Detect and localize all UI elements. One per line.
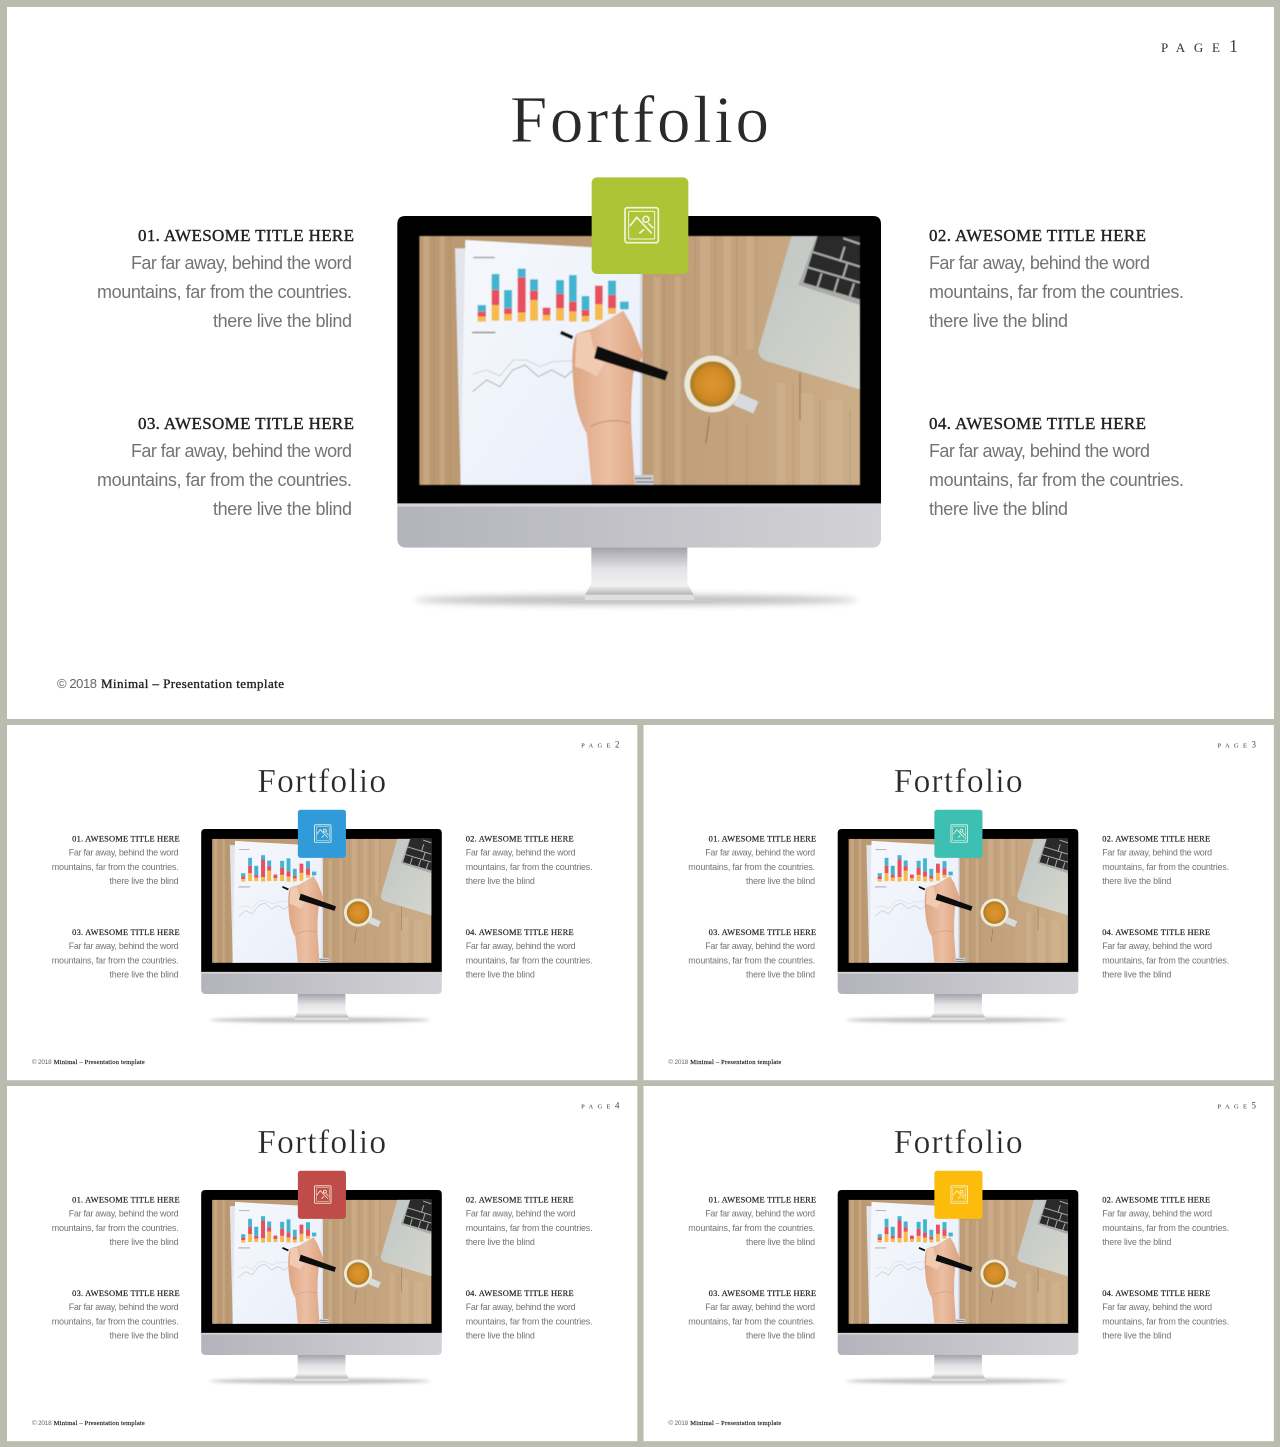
footer: © 2018 (668, 1419, 689, 1427)
icon: image badge (934, 1171, 982, 1219)
footer: Minimal – Presentation template (690, 1420, 781, 1427)
monitor with photo (201, 1190, 442, 1384)
text block 03: 03. AWESOME TITLE HERE (709, 927, 816, 937)
text block 01: 01. AWESOME TITLE HERE (138, 226, 354, 245)
text block 03: Far far away, behind the word (705, 941, 815, 951)
slide 3: teal panel (644, 725, 1274, 1080)
page number (1161, 36, 1238, 56)
text block 01: there live the blind (109, 876, 179, 886)
text block 02: there live the blind (929, 311, 1068, 331)
slide 2: blue panel (7, 725, 637, 1080)
footer: © 2018 (32, 1058, 52, 1066)
text block 04: Far far away, behind the word (466, 1302, 576, 1312)
text block 02: mountains, far from the countries. (1102, 862, 1229, 872)
text block 04: 04. AWESOME TITLE HERE (466, 927, 574, 937)
text block 01 (688, 1194, 816, 1247)
footer: Minimal – Presentation template (54, 1420, 145, 1427)
text block 04: 04. AWESOME TITLE HERE (1102, 1288, 1210, 1298)
text block 01 (97, 226, 354, 331)
icon: image badge (592, 177, 688, 274)
text block 04: Far far away, behind the word (1102, 941, 1212, 951)
text block 04: mountains, far from the countries. (1102, 955, 1229, 965)
page number: 4 (615, 1100, 620, 1110)
text block 04 (466, 927, 593, 980)
title: Fortfolio (257, 763, 386, 800)
text block 01: mountains, far from the countries. (52, 1223, 179, 1233)
text block 01: Far far away, behind the word (705, 847, 815, 857)
page number: PAGE (581, 742, 611, 749)
text block 03: there live the blind (746, 970, 815, 980)
text block 03: mountains, far from the countries. (688, 1316, 815, 1326)
title: Fortfolio (257, 1124, 386, 1161)
monitor with photo (397, 216, 881, 605)
text block 03: 03. AWESOME TITLE HERE (709, 1288, 816, 1298)
text block 01: Far far away, behind the word (69, 847, 179, 857)
text block 02: there live the blind (1102, 876, 1171, 886)
text block 01 (688, 833, 816, 886)
page number: PAGE (1161, 40, 1220, 55)
text block 04: 04. AWESOME TITLE HERE (466, 1288, 574, 1298)
footer: Minimal – Presentation template (101, 676, 284, 691)
text block 02 (466, 833, 593, 886)
text block 03: Far far away, behind the word (131, 441, 352, 461)
text block 03 (688, 1288, 816, 1341)
footer: Minimal – Presentation template (690, 1059, 781, 1066)
text block 04 (466, 1288, 593, 1341)
text block 04: mountains, far from the countries. (466, 955, 593, 965)
text block 02 (466, 1194, 593, 1247)
text block 01: 01. AWESOME TITLE HERE (72, 1194, 180, 1204)
text block 03: 03. AWESOME TITLE HERE (72, 1288, 180, 1298)
text block 01: 01. AWESOME TITLE HERE (72, 833, 180, 843)
text block 02: 02. AWESOME TITLE HERE (929, 226, 1146, 245)
text block 03 (52, 1288, 180, 1341)
slide 4: red panel (7, 1086, 637, 1441)
text block 04: there live the blind (1102, 1331, 1171, 1341)
text block 03: Far far away, behind the word (69, 941, 179, 951)
text block 01: there live the blind (109, 1237, 179, 1247)
text block 02: 02. AWESOME TITLE HERE (466, 833, 574, 843)
text block 02 (1102, 833, 1229, 886)
text block 01 (52, 1194, 180, 1247)
text block 02: 02. AWESOME TITLE HERE (1102, 833, 1210, 843)
text block 02 (929, 226, 1184, 331)
text block 04: 04. AWESOME TITLE HERE (929, 414, 1146, 433)
icon: image badge (934, 810, 982, 858)
title: Fortfolio (510, 83, 769, 157)
page number (581, 1100, 620, 1110)
footer: © 2018 (32, 1419, 52, 1427)
text block 02: mountains, far from the countries. (1102, 1223, 1229, 1233)
text block 03 (97, 414, 354, 519)
text block 01: 01. AWESOME TITLE HERE (709, 833, 816, 843)
text block 03: 03. AWESOME TITLE HERE (138, 414, 354, 433)
text block 02: Far far away, behind the word (466, 1208, 576, 1218)
page number (1218, 739, 1256, 749)
slide 5: yellow panel (644, 1086, 1274, 1441)
text block 02: mountains, far from the countries. (466, 862, 593, 872)
text block 01: mountains, far from the countries. (688, 862, 815, 872)
text block 01 (52, 833, 180, 886)
text block 02: mountains, far from the countries. (466, 1223, 593, 1233)
text block 03: Far far away, behind the word (705, 1302, 815, 1312)
text block 03: there live the blind (109, 970, 179, 980)
page number: PAGE (581, 1103, 611, 1110)
text block 03: mountains, far from the countries. (52, 955, 179, 965)
text block 03: there live the blind (213, 499, 352, 519)
text block 03 (688, 927, 816, 980)
text block 04: Far far away, behind the word (1102, 1302, 1212, 1312)
title: Fortfolio (894, 763, 1023, 800)
text block 01: mountains, far from the countries. (52, 862, 179, 872)
footer: © 2018 (57, 676, 97, 691)
monitor with photo (201, 829, 442, 1023)
page number: PAGE (1218, 742, 1247, 749)
text block 01: there live the blind (213, 311, 352, 331)
text block 02: there live the blind (1102, 1237, 1171, 1247)
text block 03 (52, 927, 180, 980)
text block 03: mountains, far from the countries. (688, 955, 815, 965)
monitor with photo (838, 1190, 1078, 1384)
text block 01: mountains, far from the countries. (688, 1223, 815, 1233)
text block 01: 01. AWESOME TITLE HERE (709, 1194, 816, 1204)
icon: image badge (298, 810, 346, 858)
text block 01: there live the blind (746, 1237, 815, 1247)
text block 01: Far far away, behind the word (705, 1208, 815, 1218)
text block 04: mountains, far from the countries. (1102, 1316, 1229, 1326)
text block 01: Far far away, behind the word (69, 1208, 179, 1218)
text block 03: mountains, far from the countries. (52, 1316, 179, 1326)
text block 02 (1102, 1194, 1229, 1247)
text block 04: there live the blind (929, 499, 1068, 519)
page number (581, 739, 619, 749)
text block 02: there live the blind (466, 1237, 535, 1247)
text block 02: there live the blind (466, 876, 535, 886)
text block 04: Far far away, behind the word (466, 941, 576, 951)
page number: 1 (1229, 36, 1238, 56)
text block 04: there live the blind (1102, 970, 1171, 980)
text block 04: Far far away, behind the word (929, 441, 1150, 461)
page number: 2 (615, 739, 619, 749)
text block 03: Far far away, behind the word (69, 1302, 179, 1312)
page number: PAGE (1218, 1103, 1247, 1110)
title: Fortfolio (894, 1124, 1023, 1161)
text block 04 (929, 414, 1184, 519)
page number: 3 (1251, 739, 1256, 749)
text block 04: there live the blind (466, 1331, 535, 1341)
text block 02: Far far away, behind the word (466, 847, 576, 857)
page number: 5 (1251, 1100, 1256, 1110)
text block 02: Far far away, behind the word (1102, 847, 1212, 857)
text block 03: 03. AWESOME TITLE HERE (72, 927, 180, 937)
text block 04 (1102, 927, 1229, 980)
text block 02: 02. AWESOME TITLE HERE (1102, 1194, 1210, 1204)
slide 1: main panel (7, 7, 1274, 719)
text block 03: there live the blind (746, 1331, 815, 1341)
text block 04: 04. AWESOME TITLE HERE (1102, 927, 1210, 937)
text block 01: there live the blind (746, 876, 815, 886)
text block 01: Far far away, behind the word (131, 253, 352, 273)
page number (1218, 1100, 1256, 1110)
text block 04: mountains, far from the countries. (929, 470, 1184, 490)
text block 04: mountains, far from the countries. (466, 1316, 593, 1326)
monitor with photo (838, 829, 1078, 1023)
text block 04: there live the blind (466, 970, 535, 980)
text block 02: 02. AWESOME TITLE HERE (466, 1194, 574, 1204)
text block 02: mountains, far from the countries. (929, 282, 1184, 302)
footer: © 2018 (668, 1058, 689, 1066)
text block 03: mountains, far from the countries. (97, 470, 352, 490)
icon: image badge (298, 1171, 346, 1219)
text block 02: Far far away, behind the word (929, 253, 1150, 273)
text block 03: there live the blind (109, 1331, 179, 1341)
text block 01: mountains, far from the countries. (97, 282, 352, 302)
footer: Minimal – Presentation template (54, 1059, 145, 1066)
text block 04 (1102, 1288, 1229, 1341)
text block 02: Far far away, behind the word (1102, 1208, 1212, 1218)
